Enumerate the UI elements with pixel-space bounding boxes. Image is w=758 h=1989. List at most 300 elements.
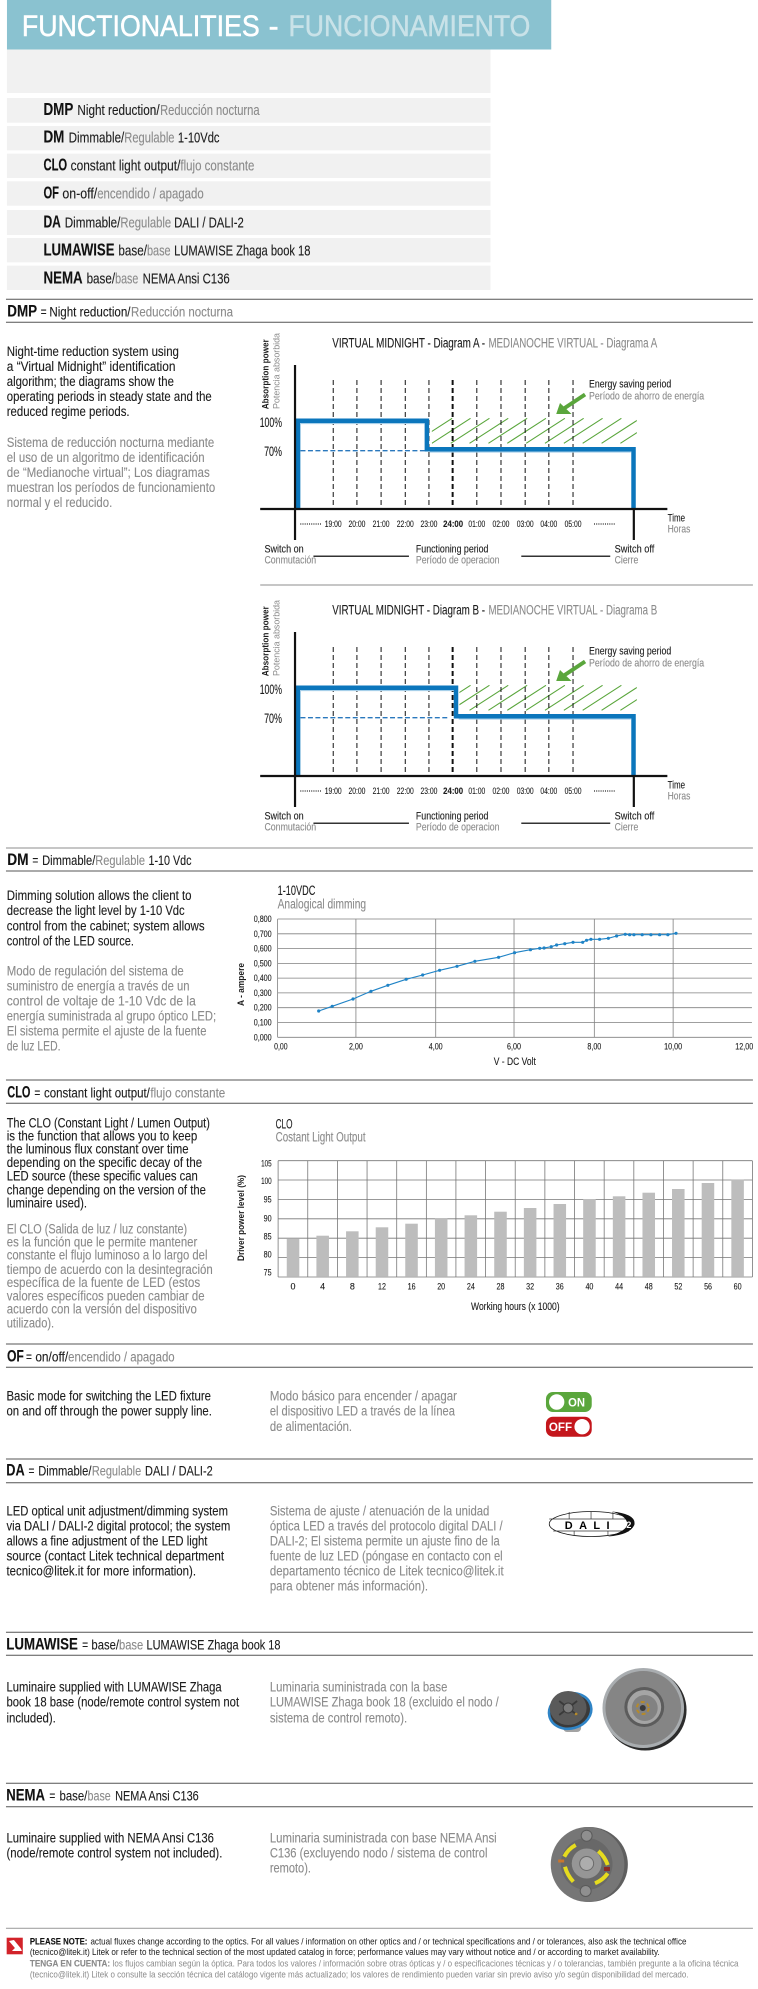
text block: DA spanish: departamento técnico de Litek tecnico@litek.it (270, 1562, 504, 1578)
note text (30, 1936, 739, 1980)
axis titles: Driver power level (%) (236, 1175, 246, 1261)
percent labels B: 70% (264, 710, 282, 726)
text block: DMP spanish: el uso de un algoritmo de identificación (7, 449, 205, 465)
text block: NEMA spanish: remoto). (270, 1860, 311, 1876)
heading: DM: Regulable (95, 852, 145, 868)
heading: NEMA: base/ (60, 1788, 87, 1804)
text block: DM english: Dimming solution allows the client to (7, 887, 192, 903)
list row: NEMA: NEMA (43, 268, 83, 288)
list row: DM: 1-10Vdc (178, 130, 220, 147)
time labels A: 03:00 (517, 519, 534, 530)
heading: DM: DM (7, 851, 29, 869)
axes A (260, 365, 667, 540)
x tick labels: 32 (526, 1282, 534, 1292)
list row: LUMAWISE: base/ (118, 243, 148, 260)
period labels A: Functioning period (416, 543, 488, 555)
list row: DMP: DMP (43, 99, 74, 119)
text block: DMP spanish (7, 434, 215, 510)
chart title (276, 1115, 366, 1145)
heading: DM: 1-10 Vdc (148, 852, 192, 868)
text block: DMP spanish: normal y el reducido. (7, 494, 112, 510)
text block: LUMAWISE english (6, 1679, 239, 1725)
percent labels A: 100% (260, 414, 282, 430)
text block: NEMA spanish: Luminaria suministrada con base NEMA Ansi (270, 1829, 497, 1845)
y tick labels (261, 1158, 272, 1278)
time labels B: 03:00 (517, 786, 534, 797)
text block: OF english: on and off through the power supply line. (6, 1402, 212, 1418)
text block: OF spanish: de alimentación. (270, 1418, 352, 1434)
text block: DMP english: a “Virtual Midnight” identification (7, 358, 176, 374)
percent labels B: 100% (260, 681, 282, 697)
text block: DM spanish: energía suministrada al grupo óptico LED; (7, 1008, 216, 1024)
y tick labels: 0,700 (254, 929, 272, 939)
text block: DM spanish: El sistema permite el ajuste de la fuente (7, 1023, 207, 1039)
x tick labels: 28 (497, 1282, 504, 1292)
list row: DA: DALI / DALI-2 (174, 215, 244, 232)
energy saving label A: Período de ahorro de energía (589, 390, 705, 402)
y tick labels: 90 (264, 1214, 272, 1224)
x axis title A: Horas (668, 524, 691, 536)
text block: DM english: control from the cabinet; system allows (7, 917, 205, 933)
hour guide lines B (333, 647, 573, 776)
energy saving label A (589, 379, 705, 402)
power dashed reference A (300, 450, 426, 452)
text block: DA english: source (contact Litek technical department (6, 1547, 224, 1563)
time labels A: 04:00 (540, 519, 557, 530)
text block: LUMAWISE english: Luminaire supplied with LUMAWISE Zhaga (6, 1679, 222, 1695)
axes B (260, 632, 667, 807)
x axis title A (668, 513, 691, 536)
text block: DM english: decrease the light level by 1-10 Vdc (7, 902, 185, 918)
text block: LUMAWISE english: included). (6, 1709, 56, 1725)
heading: DMP: = (41, 304, 47, 320)
text block: LUMAWISE spanish: LUMAWISE Zhaga book 18 (excluido el nodo / (270, 1694, 499, 1710)
y tick labels: 0,300 (254, 988, 272, 998)
list row: NEMA (7, 266, 491, 290)
period labels B: Cierre (615, 821, 638, 833)
y tick labels: 100 (261, 1176, 272, 1186)
heading: LUMAWISE: base (119, 1636, 143, 1652)
energy saving label B: Energy saving period (589, 646, 671, 658)
time labels A: 24:00 (443, 519, 463, 530)
heading: LUMAWISE: base/ (91, 1636, 119, 1652)
heading: DMP: Reducción nocturna (131, 304, 233, 320)
text block: NEMA english (6, 1829, 222, 1860)
list row: LUMAWISE (7, 238, 491, 262)
y tick labels: 95 (264, 1195, 272, 1205)
heading: LUMAWISE: = (82, 1636, 88, 1652)
heading: DA: = (29, 1463, 35, 1479)
text block: LUMAWISE spanish: sistema de control remoto). (270, 1709, 407, 1725)
text block: CLO spanish: valores específicos pueden cambiar de (7, 1287, 205, 1303)
list row: DM: DM (43, 127, 64, 147)
time labels B: 24:00 (443, 786, 463, 797)
heading: OF: = (26, 1349, 32, 1365)
text block: DA spanish: óptica LED a través del protocolo digital DALI / (270, 1517, 503, 1533)
heading: DM: = (32, 852, 38, 868)
text block: LUMAWISE spanish (270, 1679, 499, 1725)
list row: DA (7, 210, 491, 235)
text block: CLO english (7, 1115, 210, 1211)
text block: CLO english: luminaire used). (7, 1195, 87, 1211)
percent labels A: 70% (264, 443, 282, 459)
period labels B: Conmutación (264, 821, 316, 833)
panel: function list (7, 98, 491, 290)
heading: LUMAWISE (6, 1635, 281, 1653)
text block: DM spanish (7, 962, 216, 1054)
y axis title A: Absorption power (261, 339, 272, 409)
axis titles (236, 963, 536, 1068)
title banner: FUNCIONAMIENTO (289, 10, 530, 43)
text block: CLO english: the luminous flux constant over time (7, 1141, 189, 1157)
empty grey panel (7, 50, 491, 93)
x tick labels: 20 (437, 1282, 445, 1292)
text block: DA english (6, 1502, 230, 1578)
time labels B: 23:00 (420, 786, 437, 797)
icon: DALI logo (549, 1512, 635, 1536)
title banner: FUNCTIONALITIES (22, 10, 260, 43)
x tick labels: 24 (467, 1282, 475, 1292)
chart title (278, 882, 366, 912)
x tick labels (291, 1282, 742, 1292)
heading: DMP (7, 303, 233, 321)
text block: NEMA spanish (270, 1829, 497, 1876)
text block: DA spanish (270, 1502, 504, 1594)
text block: LUMAWISE spanish: Luminaria suministrada con la base (270, 1679, 448, 1695)
text block: DM spanish: control de voltaje de 1-10 Vdc de la (7, 993, 196, 1009)
y axis title B: Absorption power (261, 606, 272, 676)
time labels B: 21:00 (373, 786, 390, 797)
text block: DM spanish: Modo de regulación del sistema de (7, 962, 184, 978)
list row: DMP: Night reduction/ (77, 102, 160, 119)
x tick labels: 0 (291, 1282, 296, 1292)
text block: DMP english: Night-time reduction system using (7, 343, 179, 359)
heading: DMP: Night reduction/ (49, 304, 131, 320)
time labels A: 22:00 (397, 519, 414, 530)
list row: CLO: constant light output/ (71, 158, 181, 175)
text block: DMP english: operating periods in steady state and the (7, 388, 212, 404)
x tick labels: 16 (408, 1282, 416, 1292)
list row: LUMAWISE: base (147, 243, 171, 260)
text block: CLO english: The CLO (Constant Light / Lumen Output) (7, 1115, 210, 1131)
list row: OF: OF (43, 183, 59, 203)
chart title A: MEDIANOCHE VIRTUAL - Diagrama A (488, 335, 658, 351)
heading: DA (6, 1462, 213, 1480)
text block: DA english: allows a fine adjustment of the LED light (6, 1532, 208, 1548)
text block: CLO spanish: acuerdo con la versión del dispositivo (7, 1301, 197, 1317)
time labels A: 20:00 (348, 519, 365, 530)
section rules (6, 299, 753, 1807)
list row: CLO: flujo constante (180, 158, 254, 175)
chart title B: VIRTUAL MIDNIGHT - Diagram B - (332, 602, 485, 618)
heading: DM (7, 851, 192, 869)
icon: off toggle (546, 1417, 592, 1437)
y axis title A: Potencia absorbida (272, 332, 283, 409)
chart: CLO bar chart (236, 1115, 752, 1313)
heading: DM: Dimmable/ (42, 852, 95, 868)
list row: DMP (7, 98, 491, 123)
text block: DA spanish: DALI-2; El sistema permite un ajuste fino de la (270, 1532, 500, 1548)
heading: DA: DALI / DALI-2 (145, 1463, 213, 1479)
period labels B (264, 810, 655, 833)
text block: OF spanish (270, 1387, 457, 1434)
heading: NEMA: NEMA (6, 1787, 45, 1805)
energy saving hatch A (432, 418, 637, 444)
text block: DMP spanish: muestran los períodos de funcionamiento (7, 479, 215, 495)
text block: CLO spanish: El CLO (Salida de luz / luz constante) (7, 1220, 187, 1236)
x tick labels: 8,00 (587, 1041, 601, 1051)
x axis title B: Time (668, 780, 685, 792)
midnight line A (452, 380, 454, 509)
power curve B (298, 688, 634, 776)
list row: DA: Regulable (120, 215, 171, 232)
x tick labels: 56 (704, 1282, 712, 1292)
list row: DA: Dimmable/ (65, 215, 121, 232)
heading: DA: DA (6, 1462, 25, 1480)
chart title: CLO (276, 1115, 293, 1131)
list row: DM (7, 126, 491, 150)
list row: NEMA: base (115, 271, 138, 288)
text block: OF spanish: Modo básico para encender / apagar (270, 1387, 457, 1403)
y tick labels: 0,200 (254, 1003, 272, 1013)
energy saving hatch B (459, 685, 637, 711)
energy saving label A: Energy saving period (589, 379, 671, 391)
list row: LUMAWISE: LUMAWISE (43, 240, 115, 260)
list row: DM: Regulable (124, 130, 175, 147)
y tick labels: 0,800 (254, 914, 272, 924)
text block: CLO spanish: es la función que le permite mantener (7, 1234, 198, 1250)
heading: NEMA: NEMA Ansi C136 (115, 1788, 199, 1804)
heading: OF (7, 1348, 175, 1366)
text block: CLO spanish (7, 1220, 213, 1330)
time labels A: 23:00 (420, 519, 437, 530)
heading: CLO: constant light output/ (44, 1084, 150, 1100)
heading: OF: OF (7, 1348, 24, 1366)
text block: DA spanish: fuente de luz LED (póngase en contacto con el (270, 1547, 503, 1563)
period labels B: Switch off (615, 810, 655, 822)
axis titles: Working hours (x 1000) (471, 1301, 560, 1313)
text block: NEMA english: Luminaire supplied with NEMA Ansi C136 (6, 1829, 214, 1845)
chart title B: MEDIANOCHE VIRTUAL - Diagrama B (488, 602, 657, 618)
list row: OF (7, 181, 491, 206)
chart: diagram A (260, 332, 705, 566)
icon: Zhaga socket base (602, 1668, 687, 1750)
x tick labels: 12,00 (735, 1041, 753, 1051)
period labels A: Switch on (264, 543, 304, 555)
text block: DMP english: reduced regime periods. (7, 403, 130, 419)
heading: DMP: DMP (7, 303, 37, 321)
time labels B: 22:00 (397, 786, 414, 797)
period labels A: Conmutación (264, 554, 316, 566)
note text: PLEASE NOTE: (30, 1936, 87, 1946)
heading: DA: Dimmable/ (38, 1463, 92, 1479)
x tick labels: 0,00 (274, 1041, 288, 1051)
x tick labels: 44 (615, 1282, 623, 1292)
data markers (319, 933, 676, 1011)
text block: NEMA spanish: C136 (excluyendo nodo / sistema de control (270, 1844, 487, 1860)
icon: off toggle: OFF (549, 1420, 572, 1434)
note text: (tecnico@litek.it) Litek or refer to the technical section of the most updated catalog in force; performance values may vary without notice and / or according to market availability. (30, 1947, 660, 1957)
bars (287, 1180, 744, 1276)
y tick labels: 0,100 (254, 1017, 272, 1028)
text block: DMP english: algorithm; the diagrams show the (7, 373, 174, 389)
x tick labels: 2,00 (349, 1041, 363, 1051)
period labels A (264, 543, 655, 566)
text block: DMP spanish: Sistema de reducción nocturna mediante (7, 434, 214, 450)
y tick labels: 105 (261, 1158, 272, 1168)
chart title B (332, 602, 657, 618)
heading: NEMA: = (49, 1788, 55, 1804)
text block: CLO spanish: constante el flujo luminoso a lo largo del (7, 1246, 207, 1262)
text block: DA english: LED optical unit adjustment/dimming system (6, 1502, 228, 1518)
list row: DMP: Reducción nocturna (160, 102, 260, 119)
time labels B: 19:00 (325, 786, 342, 797)
text block: DA spanish: para obtener más información). (270, 1578, 428, 1594)
text block: OF english: Basic mode for switching the LED fixture (6, 1387, 211, 1403)
time labels A: 19:00 (325, 519, 342, 530)
text block: DM spanish: de luz LED. (7, 1038, 60, 1054)
list row: NEMA: NEMA Ansi C136 (143, 271, 230, 288)
time labels B: 02:00 (493, 786, 509, 797)
hour guide lines A (333, 380, 573, 509)
heading: CLO: flujo constante (150, 1084, 225, 1100)
power dashed reference B (300, 717, 450, 719)
x tick labels: 60 (734, 1282, 742, 1292)
time labels B: 04:00 (540, 786, 557, 797)
text block: DMP spanish: de “Medianoche virtual”; Los diagramas (7, 464, 210, 480)
x tick labels (274, 1041, 753, 1051)
title banner (7, 0, 551, 50)
heading: OF: encendido / apagado (68, 1349, 175, 1365)
percent labels A (260, 414, 282, 459)
text block: DMP english (7, 343, 212, 419)
icon: NEMA socket (551, 1827, 628, 1902)
note text: TENGA EN CUENTA: (30, 1958, 110, 1968)
x tick labels: 36 (556, 1282, 564, 1292)
y tick labels: 75 (264, 1268, 272, 1278)
period labels A: Switch off (615, 543, 655, 555)
list row: DA: DA (43, 212, 61, 232)
y tick labels (254, 914, 272, 1042)
text block: CLO english: depending on the specific decay of the (7, 1154, 202, 1170)
period labels B: Switch on (264, 810, 304, 822)
time labels B: 20:00 (348, 786, 365, 797)
x tick labels: 12 (378, 1282, 386, 1292)
time labels B: 05:00 (565, 786, 581, 797)
text block: DM english: control of the LED source. (7, 932, 134, 948)
time labels A: 21:00 (373, 519, 390, 530)
note text: actual fluxes change according to the optics. For all values / information on other optics and / or technical specifications and / or tolerances, also ask the technical office (90, 1936, 686, 1946)
heading: LUMAWISE: LUMAWISE (6, 1635, 78, 1653)
axis titles: V - DC Volt (494, 1056, 536, 1068)
list row: CLO: CLO (43, 155, 67, 175)
text block: CLO spanish: específica de la fuente de LED (estos (7, 1274, 200, 1290)
icon: note warning (7, 1938, 23, 1954)
x tick labels: 52 (674, 1282, 682, 1292)
heading: DA: Regulable (92, 1463, 141, 1479)
list row: LUMAWISE: LUMAWISE Zhaga book 18 (174, 243, 310, 260)
text block: DM spanish: suministro de energía a través de un (7, 978, 190, 994)
heading: NEMA (6, 1787, 199, 1805)
time labels A: 05:00 (565, 519, 581, 530)
heading: OF: on/off/ (35, 1349, 68, 1365)
list row: NEMA: base/ (87, 271, 116, 288)
y tick labels: 80 (264, 1250, 272, 1260)
axis titles: A - ampere (236, 963, 246, 1006)
arrow: energy saving B (556, 662, 585, 681)
icon: DALI logo: 2 (626, 1520, 631, 1530)
heading: CLO: = (34, 1084, 40, 1100)
icon: on toggle (546, 1392, 592, 1412)
energy saving label B (589, 646, 705, 669)
icon: Zhaga node connector (545, 1689, 595, 1733)
y tick labels: 85 (264, 1232, 272, 1242)
x tick labels: 4 (320, 1282, 325, 1292)
icon: on toggle: ON (568, 1395, 585, 1410)
percent labels B (260, 681, 282, 726)
text block: DA english: via DALI / DALI-2 digital protocol; the system (6, 1517, 230, 1533)
chart title A (332, 335, 658, 351)
period labels B: Functioning period (416, 810, 488, 822)
chart title: 1-10VDC (278, 882, 315, 898)
text block: CLO english: is the function that allows you to keep (7, 1128, 198, 1144)
text block: CLO english: change depending on the version of the (7, 1181, 206, 1197)
heading: NEMA: base (88, 1788, 111, 1804)
text block: OF english (6, 1387, 212, 1418)
icon: DALI logo: DALI (565, 1520, 610, 1532)
x tick labels: 6,00 (507, 1041, 521, 1051)
list row: CLO (7, 154, 491, 178)
chart: diagram B (260, 599, 705, 833)
y axis title B (261, 599, 283, 676)
midnight line B (452, 647, 454, 776)
x tick labels: 8 (350, 1282, 355, 1292)
heading: CLO: CLO (7, 1083, 31, 1101)
period labels A: Período de operacion (416, 554, 499, 566)
time labels A (300, 519, 616, 530)
time labels B: 01:00 (468, 786, 485, 797)
x tick labels: 4,00 (429, 1041, 443, 1051)
energy saving label B: Período de ahorro de energía (589, 657, 705, 669)
time labels A: 01:00 (468, 519, 485, 530)
heading: LUMAWISE: LUMAWISE Zhaga book 18 (147, 1636, 281, 1652)
data line (319, 933, 676, 1011)
x axis title B (668, 780, 691, 803)
arrow: energy saving A (556, 394, 585, 414)
title banner: - (269, 10, 279, 43)
period labels A: Cierre (615, 554, 638, 566)
list row: DM: Dimmable/ (69, 130, 125, 147)
y axis title A (261, 332, 283, 409)
text block: CLO english: LED source (these specific values can (7, 1168, 198, 1184)
text block: DM english (7, 887, 205, 948)
x axis title A: Time (668, 513, 685, 525)
chart title: Analogical dimming (278, 896, 366, 912)
period labels B: Período de operacion (416, 821, 499, 833)
y axis title B: Potencia absorbida (272, 599, 283, 676)
text block: CLO spanish: tiempo de acuerdo con la desintegración (7, 1261, 213, 1277)
text block: NEMA english: (node/remote control system not included). (6, 1844, 222, 1860)
x tick labels: 48 (645, 1282, 653, 1292)
x tick labels: 10,00 (664, 1041, 682, 1051)
text block: DA english: tecnico@litek.it for more information). (6, 1562, 196, 1578)
y tick labels: 0,600 (254, 944, 272, 954)
text block: LUMAWISE english: book 18 base (node/remote control system not (6, 1694, 239, 1710)
chart title A: VIRTUAL MIDNIGHT - Diagram A - (332, 335, 485, 351)
axis titles (236, 1175, 560, 1313)
power curve A (298, 421, 634, 509)
list row: OF: on-off/ (62, 186, 98, 203)
